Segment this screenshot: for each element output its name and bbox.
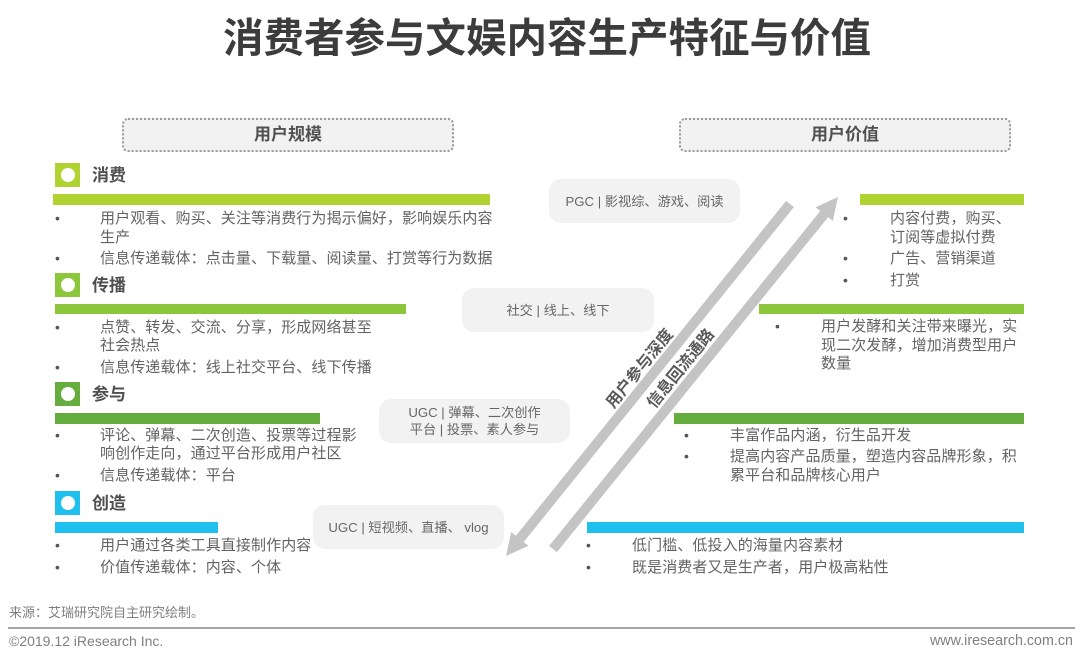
panel: create bbox=[55, 491, 311, 576]
panel: value of spread bbox=[759, 304, 1024, 372]
bullet text 1: 点赞、转发、交流、分享，形成网络甚至 bbox=[100, 319, 372, 336]
bar: participate bbox=[55, 413, 320, 424]
heading: spread: 传播 bbox=[92, 276, 126, 295]
bullet text 1: • bbox=[55, 210, 60, 226]
bullet text 1: 订阅等虚拟付费 bbox=[890, 229, 996, 246]
heading: user value: 用户价值 bbox=[811, 125, 879, 144]
bar: consume bbox=[53, 194, 490, 205]
icon: participate bbox=[55, 382, 80, 406]
bullet text 1 bbox=[843, 210, 1011, 246]
bullet text 1: 用户观看、购买、关注等消费行为揭示偏好，影响娱乐内容 bbox=[100, 210, 493, 227]
pill: PGC: PGC | 影视综、游戏、阅读 bbox=[565, 194, 724, 208]
bar bbox=[674, 413, 1024, 424]
bullet text 2: 既是消费者又是生产者，用户极高粘性 bbox=[632, 559, 889, 576]
bar bbox=[860, 194, 1024, 205]
heading: participate: 参与 bbox=[92, 385, 126, 404]
bullet text 1: • bbox=[55, 319, 60, 335]
bullet text 1: • bbox=[843, 210, 848, 226]
bullet text 1: 社会热点 bbox=[100, 337, 160, 354]
bullet text 2: 累平台和品牌核心用户 bbox=[730, 467, 881, 484]
heading: consume: 消费 bbox=[92, 166, 126, 185]
label: participation depth: 用户参与深度 bbox=[602, 325, 677, 412]
bullet text 1: • bbox=[684, 427, 689, 443]
bullet text 3: • bbox=[843, 272, 848, 288]
bullet text 1: 丰富作品内涵，衍生品开发 bbox=[730, 427, 911, 444]
panel: value of create bbox=[586, 522, 1024, 576]
arrow: down-left participation depth bbox=[506, 201, 794, 556]
bullet text 2: 价值传递载体：内容、个体 bbox=[100, 559, 281, 576]
pill: social: 社交 | 线上、线下 bbox=[506, 302, 610, 318]
bullet text 2: • bbox=[684, 448, 689, 464]
title: 消费者参与文娱内容生产特征与价值 bbox=[223, 15, 871, 61]
heading: user scale bbox=[122, 118, 454, 152]
bullet text 1: 评论、弹幕、二次创造、投票等过程影 bbox=[100, 427, 357, 444]
icon: spread bbox=[55, 273, 80, 297]
label: information backflow: 信息回流通路 bbox=[643, 325, 718, 412]
bullet text 2: 广告、营销渠道 bbox=[890, 250, 996, 267]
heading: user value bbox=[679, 118, 1011, 152]
bullet text bbox=[775, 318, 1017, 372]
bullet text 2: 信息传递载体：点击量、下载量、阅读量、打赏等行为数据 bbox=[100, 250, 493, 267]
bullet text: 现二次发酵，增加消费型用户 bbox=[821, 337, 1017, 354]
bar: spread bbox=[55, 304, 406, 314]
icon: create bbox=[55, 491, 80, 515]
bullet text 2: • bbox=[55, 359, 60, 375]
bullet text 2: • bbox=[843, 250, 848, 266]
bullet text 2 bbox=[843, 250, 996, 267]
icon: consume bbox=[55, 163, 80, 187]
bullet text 1: 生产 bbox=[100, 229, 130, 246]
bullet text 3: 打赏 bbox=[890, 272, 920, 289]
bullet text 2: • bbox=[586, 559, 591, 575]
bullet text 2: 信息传递载体：线上社交平台、线下传播 bbox=[100, 359, 372, 376]
bullet text 1 bbox=[55, 427, 357, 462]
panel: spread bbox=[55, 273, 406, 376]
bullet text 1: 响创作走向，通过平台形成用户社区 bbox=[100, 445, 342, 462]
pill: UGC creation: UGC | 短视频、直播、 vlog bbox=[328, 520, 489, 534]
bullet text 1: 用户通过各类工具直接制作内容 bbox=[100, 537, 311, 554]
pill: PGC bbox=[549, 179, 740, 223]
bullet text 1 bbox=[55, 210, 493, 246]
bar bbox=[759, 304, 1024, 314]
bullet text 2: • bbox=[55, 559, 60, 575]
bullet text 1: • bbox=[55, 427, 60, 443]
website: www.iresearch.com.cn bbox=[930, 633, 1073, 649]
pill: social bbox=[462, 288, 654, 332]
panel: consume bbox=[53, 163, 493, 267]
panel: value of consume bbox=[843, 194, 1024, 289]
bullet text 2: • bbox=[55, 250, 60, 266]
bullet text 2: 提高内容产品质量，塑造内容品牌形象，积 bbox=[730, 448, 1017, 465]
bullet text 1: • bbox=[55, 537, 60, 553]
arrow: up-right information backflow bbox=[549, 197, 838, 552]
bullet text 1 bbox=[55, 319, 372, 354]
heading: user scale: 用户规模 bbox=[254, 125, 322, 144]
bullet text 1: 低门槛、低投入的海量内容素材 bbox=[632, 537, 843, 554]
bullet text: • bbox=[775, 318, 780, 334]
bullet text 1: • bbox=[586, 537, 591, 553]
heading: create: 创造 bbox=[92, 494, 126, 513]
source note: 来源：艾瑞研究院自主研究绘制。 bbox=[9, 605, 204, 620]
bullet text: 数量 bbox=[821, 355, 851, 372]
bullet text: 用户发酵和关注带来曝光，实 bbox=[821, 318, 1017, 335]
bar bbox=[587, 522, 1024, 533]
pill: UGC creation bbox=[313, 505, 504, 549]
bullet text 2: 信息传递载体：平台 bbox=[100, 467, 236, 484]
bullet text 2 bbox=[684, 448, 1017, 484]
pill: UGC interaction: 平台 | 投票、素人参与 bbox=[410, 422, 539, 437]
copyright: ©2019.12 iResearch Inc. bbox=[9, 633, 163, 649]
bar: create bbox=[55, 522, 218, 533]
pill: UGC interaction: UGC | 弹幕、二次创作 bbox=[408, 405, 541, 420]
bullet text 2: • bbox=[55, 467, 60, 483]
bullet text 3 bbox=[843, 272, 920, 289]
bullet text 1: 内容付费，购买、 bbox=[890, 210, 1011, 227]
panel: participate bbox=[55, 382, 357, 484]
panel: value of participate bbox=[674, 413, 1024, 484]
pill: UGC interaction bbox=[379, 399, 570, 443]
